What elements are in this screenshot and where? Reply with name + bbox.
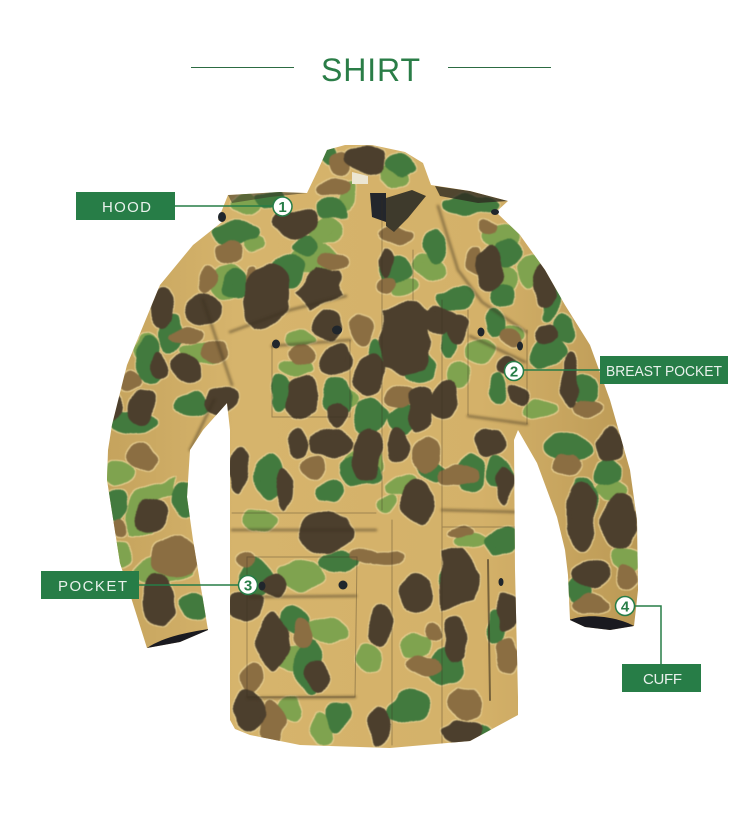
callout: hood: 1 [278,199,287,216]
seams and shadows [190,200,527,745]
callout: pocket: 3 [244,578,252,594]
collar opening [228,172,508,232]
callout: cuff: 4 [621,598,630,616]
title: SHIRT [321,52,420,88]
camouflage pattern [106,147,637,743]
callout: breast pocket: BREAST POCKET [606,363,722,380]
fabric base [100,140,645,755]
black cuffs [147,616,634,650]
callout: breast pocket [504,356,728,384]
callout: pocket: POCKET [58,578,127,595]
callout: hood: HOOD [102,199,151,216]
buttons [218,209,523,590]
callout: cuff [616,596,701,692]
callout: pocket [41,571,258,599]
callout: hood [76,192,292,220]
callout: cuff: CUFF [643,671,682,688]
jacket [100,140,645,755]
callout: breast pocket: 2 [510,364,518,380]
